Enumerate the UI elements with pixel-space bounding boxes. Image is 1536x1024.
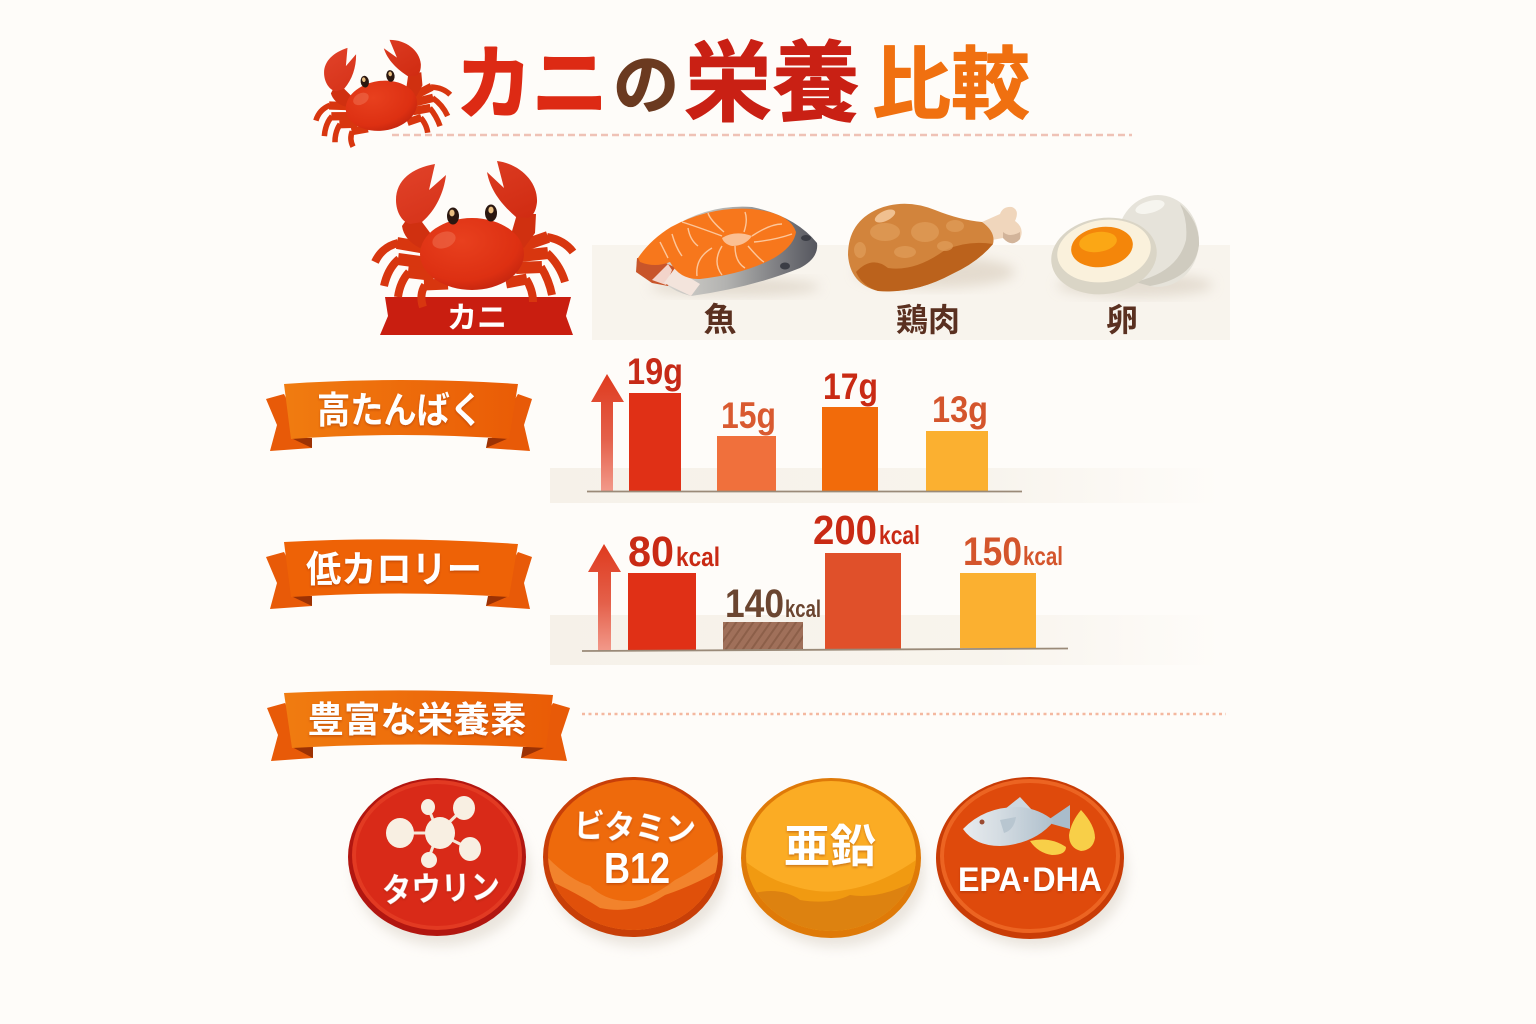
icon: chicken drumstick bbox=[848, 204, 1022, 291]
ribbon: low calorie: 低カロリー bbox=[306, 539, 482, 593]
value labels: 80 bbox=[628, 528, 674, 576]
badge: vitamin B12 bbox=[543, 777, 726, 946]
bar: fish 15g bbox=[717, 436, 776, 492]
icon: molecule bbox=[386, 796, 481, 868]
nutrients dotted rule bbox=[582, 713, 1226, 715]
title dashed rule bbox=[392, 134, 1132, 136]
value labels: kcal bbox=[1023, 541, 1063, 571]
badge: taurine: タウリン bbox=[381, 860, 501, 912]
crab eyes bbox=[447, 204, 497, 224]
crab claws bbox=[396, 161, 537, 224]
badge: vitamin B12: B12 bbox=[604, 844, 670, 893]
calorie chart bbox=[582, 507, 1068, 651]
crab body bbox=[420, 218, 524, 290]
value labels: 150 bbox=[963, 530, 1022, 574]
icon: halved boiled egg bbox=[1046, 195, 1213, 301]
bar: fish 140kcal bbox=[723, 622, 803, 650]
value labels: 140 bbox=[725, 582, 784, 626]
bar: chicken 17g bbox=[822, 407, 878, 492]
arrow: protein up bbox=[591, 374, 624, 491]
food comparison panel bbox=[592, 245, 1230, 340]
crab arms bbox=[402, 214, 536, 248]
value labels: kcal bbox=[879, 520, 920, 550]
ribbon: high protein: 高たんばく bbox=[317, 380, 483, 434]
protein chart bbox=[587, 351, 1022, 492]
crab illustration bbox=[375, 161, 573, 307]
value labels: kcal bbox=[676, 542, 720, 572]
food labels: 卵 bbox=[1106, 295, 1138, 341]
bar: chicken 200kcal bbox=[825, 553, 901, 649]
title: カニ bbox=[456, 20, 608, 136]
bar: crab 19g bbox=[629, 393, 681, 492]
title bbox=[456, 13, 1030, 140]
food labels: 鶏肉 bbox=[896, 295, 960, 341]
value labels: 17g bbox=[823, 366, 878, 407]
value labels: 13g bbox=[932, 389, 988, 430]
title crab icon bbox=[306, 33, 456, 151]
crab label banner bbox=[380, 293, 573, 337]
icon: fish and oil drops bbox=[963, 797, 1095, 855]
bar: egg 13g bbox=[926, 431, 988, 492]
title: の bbox=[613, 32, 679, 128]
food labels: 魚 bbox=[704, 293, 736, 341]
value labels: 15g bbox=[721, 395, 776, 436]
badge: zinc bbox=[741, 778, 924, 947]
food labels bbox=[704, 293, 1138, 341]
value labels: kcal bbox=[785, 596, 821, 623]
ribbon: rich nutrients bbox=[267, 690, 570, 761]
bar: egg 150kcal bbox=[960, 573, 1036, 648]
value labels bbox=[627, 351, 988, 436]
badge: EPA DHA: EPA·DHA bbox=[958, 861, 1102, 899]
badge: zinc: 亜鉛 bbox=[784, 810, 876, 875]
ribbon: high protein bbox=[266, 380, 532, 451]
badge: taurine bbox=[348, 778, 530, 946]
value labels bbox=[628, 507, 1063, 626]
badge: EPA DHA bbox=[936, 777, 1127, 947]
ribbon: rich nutrients: 豊富な栄養素 bbox=[308, 691, 526, 743]
arrow: calorie bbox=[588, 544, 621, 651]
title: 栄養 bbox=[684, 13, 860, 140]
crab label banner: カニ bbox=[447, 293, 507, 337]
title: 比較 bbox=[872, 20, 1030, 135]
value labels: 200 bbox=[813, 507, 877, 553]
value labels: 19g bbox=[627, 351, 683, 392]
badge: vitamin B12: ビタミン bbox=[573, 799, 697, 851]
bar: crab 80kcal bbox=[628, 573, 696, 651]
protein chart band bbox=[550, 468, 1220, 503]
ribbon: low calorie bbox=[266, 539, 532, 609]
icon: salmon steak bbox=[636, 207, 820, 296]
calorie chart band bbox=[550, 615, 1220, 665]
